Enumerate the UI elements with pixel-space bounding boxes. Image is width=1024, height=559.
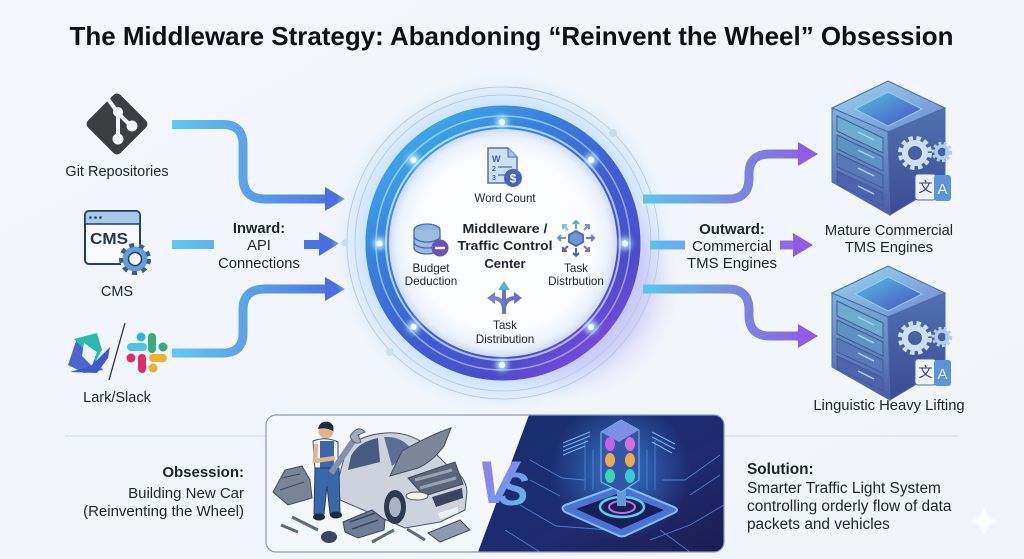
heading: middleware traffic control center: Traffic Control	[458, 238, 552, 253]
label: CMS: CMS	[101, 284, 133, 300]
icon: CMS	[85, 211, 150, 274]
label: solution: Solution:	[747, 461, 814, 478]
label: solution: Smarter Traffic Light System	[747, 480, 941, 497]
label: mature commercial TMS engines	[825, 223, 953, 256]
label: budget deduction: Budget	[412, 262, 450, 275]
icon: budget deduction	[414, 224, 448, 256]
label: inward API connections: Inward:	[233, 221, 285, 237]
label: solution: controlling orderly flow of data	[747, 498, 952, 515]
label: task distribution right: Distrbution	[548, 275, 604, 288]
icon: task distribution fork	[487, 281, 522, 314]
label: outward commercial TMS engines: Commercial	[692, 238, 772, 255]
label: git repositories: Git Repositories	[65, 164, 169, 180]
icon: server linguistic heavy lifting	[832, 266, 951, 400]
label: inward API connections	[218, 221, 300, 272]
icon: sparkle watermark	[971, 506, 997, 536]
label: task distribution right: Task	[564, 262, 588, 275]
icon: server mature commercial TMS	[832, 81, 951, 215]
car	[338, 433, 467, 528]
central hub: traffic control ring	[331, 71, 680, 415]
label: budget deduction	[405, 262, 457, 288]
label: solution: packets and vehicles	[747, 516, 890, 533]
label: word count: Word Count	[474, 193, 536, 205]
label: outward commercial TMS engines: TMS Engines	[687, 255, 777, 272]
VS badge: S	[498, 463, 529, 515]
label: task distribution bottom: Task	[493, 319, 517, 332]
icon: word count: 2	[492, 166, 496, 173]
icon: word count	[488, 148, 522, 187]
label: task distribution bottom: Distribution	[476, 333, 534, 346]
icon: word count: $	[510, 172, 517, 186]
arrow: inward middle	[172, 232, 339, 256]
icon: word count: W	[492, 154, 501, 164]
label: obsession	[83, 464, 244, 520]
label: task distribution right	[548, 262, 604, 288]
heading: middleware traffic control center	[458, 221, 552, 271]
arrow: outward top	[643, 142, 818, 199]
panel: car versus traffic light comparison	[266, 400, 724, 552]
mechanic	[318, 428, 334, 438]
label: inward API connections: Connections	[218, 256, 300, 272]
label: outward commercial TMS engines	[687, 221, 777, 272]
label: mature commercial TMS engines: Mature Commercial	[825, 223, 953, 239]
label: task distribution bottom	[476, 319, 534, 346]
arrow: outward middle	[650, 233, 813, 257]
label: mature commercial TMS engines: TMS Engines	[845, 240, 933, 256]
arrow: outward bottom	[643, 289, 818, 348]
icon: git repositories	[84, 91, 150, 157]
scene: digital traffic light	[478, 416, 724, 552]
label: outward commercial TMS engines: Outward:	[699, 221, 765, 238]
label: Lark/Slack: Lark/Slack	[83, 390, 152, 406]
icon: CMS: CMS	[90, 231, 128, 248]
arrow: inward bottom	[172, 277, 345, 353]
label: linguistic heavy lifting: Linguistic Heavy Lifting	[813, 398, 965, 414]
scene: mechanic and car	[273, 422, 470, 543]
label: solution	[747, 461, 952, 533]
VS badge: V	[477, 449, 522, 516]
label: obsession: Building New Car	[128, 485, 244, 502]
label: obsession: Obsession:	[162, 464, 244, 481]
label: budget deduction: Deduction	[405, 275, 457, 288]
icon: Lark and Slack	[68, 323, 168, 380]
title: The Middleware Strategy: Abandoning “Reinvent the Wheel” Obsession	[70, 21, 954, 51]
icon: task distribution arrows radial	[558, 221, 594, 256]
arrow: inward top	[172, 124, 345, 211]
heading: middleware traffic control center: Middleware /	[462, 221, 548, 236]
heading: middleware traffic control center: Center	[484, 256, 526, 271]
icon: word count: 3	[492, 175, 496, 182]
label: obsession: (Reinventing the Wheel)	[83, 503, 244, 520]
label: inward API connections: API	[247, 238, 271, 254]
parts	[273, 466, 312, 505]
